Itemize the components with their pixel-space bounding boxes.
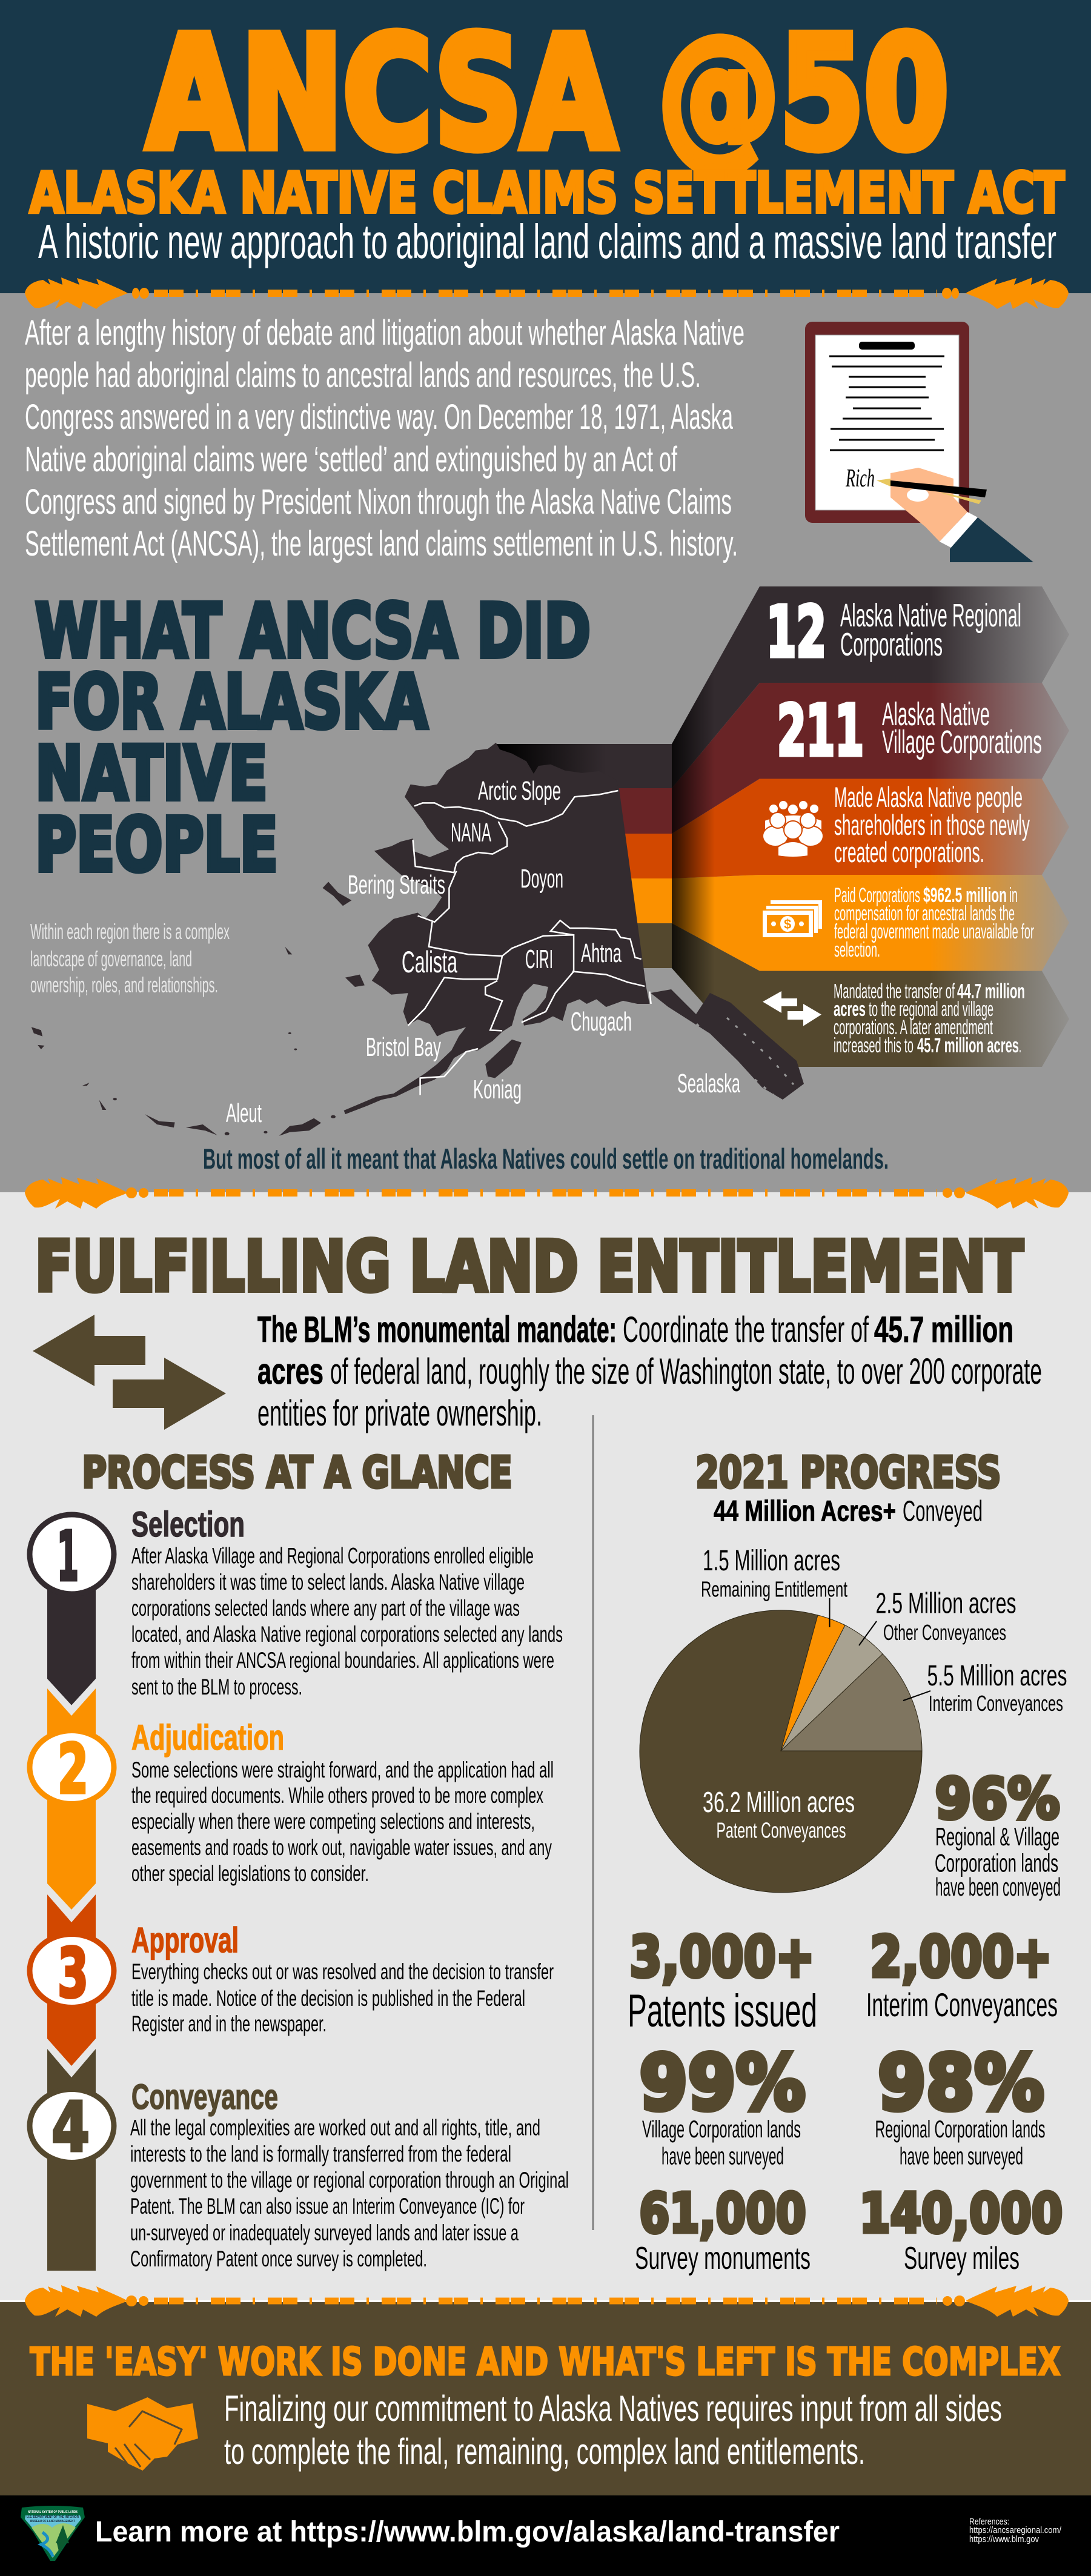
pie labels: Other Conveyances [883,1620,1006,1645]
step 1: selection [30,1505,563,1705]
map region labels: Ahtna [581,938,622,968]
note: complex landscape: Within each region there is a complex [30,919,230,944]
stat: 96 percent conveyed: 96% [935,1766,1060,1831]
pie labels [701,1545,1067,1843]
text: BLM mandate: Coordinate the transfer of [623,1309,869,1350]
note: complex landscape [30,919,230,997]
map region labels: Arctic Slope [478,776,561,806]
header block [30,4,1064,268]
icon: large transfer arrows [33,1315,226,1430]
step 3: approval: title is made. Notice of the decision is published in the Federal [131,1986,525,2011]
ribbon 4: compensation: selection. [834,938,880,961]
map region labels: NANA [451,818,491,848]
step 3: approval: 3 [58,1934,88,2013]
ribbon 5: land transfer: 44.7 million [957,980,1025,1003]
step 2: adjudication: the required documents. While others proved to be more complex [131,1783,543,1808]
map region labels: Calista [402,945,457,979]
step 3: approval: Everything checks out or was resolved and the decision to transfer [131,1959,554,1984]
divider: feather band middle [25,1177,1069,1209]
step 1: selection: sent to the BLM to process. [131,1675,302,1699]
stat: village lands surveyed: 99% [640,2039,806,2127]
panel: closing message background [0,2302,1091,2495]
pie chart: acres by status [640,1610,922,1893]
heading: what ANCSA did: NATIVE [35,731,268,817]
icon: cash stack [763,900,822,937]
step 4: conveyance: Patent. The BLM can also issue an Interim Conveyance (IC) for [130,2194,525,2219]
step 2: adjudication: easements and roads to work out, navigable water issues, and any [131,1835,552,1860]
text: BLM mandate: acres [257,1351,323,1392]
divider: feather band bottom [0,2285,1091,2317]
logo: BLM shield: U.S. DEPARTMENT OF THE INTERIOR [27,2515,79,2519]
step 4: conveyance: interests to the land is formally transferred from the federal [130,2142,511,2166]
stat: village lands surveyed: Village Corporation lands [642,2116,801,2143]
text: finalizing commitment [224,2388,1002,2472]
panel: header background [0,0,1091,293]
icon: hand signing document: Rich [845,465,875,493]
stat: regional lands surveyed: 98% [878,2039,1044,2127]
ribbon 2: village corporations: 211 [777,691,864,772]
step 1: selection: 1 [57,1518,79,1596]
step 1: selection: from within their ANCSA regional boundaries. All applications were [131,1648,554,1673]
step 4: conveyance: All the legal complexities are worked out and all rights, title, and [130,2116,540,2140]
stat: patents issued: Patents issued [628,1985,817,2037]
references [969,2517,1062,2544]
icon: group of people [763,800,823,857]
ribbon 5: land transfer: 45.7 million acres [917,1034,1019,1057]
stat: village lands surveyed [640,2039,806,2170]
logo: BLM shield [21,2506,85,2561]
ribbon 5: land transfer: increased this to [834,1034,914,1057]
step 4: conveyance: government to the village or regional corporation through an Original [130,2168,569,2193]
map region labels: CIRI [525,944,553,974]
step 2: adjudication [30,1688,554,1910]
icon: hand signing document [805,322,1033,562]
map: Alaska regions [32,743,804,1136]
map region labels: Aleut [226,1098,262,1128]
step 4: conveyance: 4 [51,2088,90,2167]
stat: survey monuments [635,2182,811,2276]
references: https://www.blm.gov [969,2534,1039,2544]
logo: BLM shield: NATIONAL SYSTEM OF PUBLIC LANDS [28,2511,78,2514]
map region labels [226,776,740,1128]
stat: interim conveyances [866,1924,1058,2023]
step 3: approval [30,1894,554,2066]
step 4: conveyance [30,2049,569,2271]
ribbon 5: land transfer [763,980,1025,1057]
ribbon 4: compensation [763,884,1034,961]
intro paragraph [25,313,744,563]
text: BLM mandate [257,1309,1042,1433]
connector bars from map to ribbons [496,744,672,968]
step 1: selection: corporations selected lands where any part of the village was [131,1596,520,1621]
text: BLM mandate: entities for private ownership. [257,1393,542,1433]
pie labels: Patent Conveyances [716,1817,846,1843]
ribbon 2: village corporations: Alaska Native [882,696,990,732]
pie labels: Remaining Entitlement [701,1576,847,1602]
ribbon 5: land transfer: acres [834,998,866,1021]
pie labels: 1.5 Million acres [703,1545,840,1577]
stat: village lands surveyed: have been surveyed [662,2143,784,2170]
stat: patents issued: 3,000+ [630,1924,814,1990]
ribbon 1: regional corporations: Corporations [840,626,943,663]
text: BLM mandate: The BLM’s monumental mandate: [257,1309,617,1350]
step 2: adjudication: other special legislations to consider. [131,1861,369,1886]
heading: 2021 progress: 44 Million Acres+ [714,1495,896,1528]
stat: survey monuments: Survey monuments [635,2241,811,2276]
step 4: conveyance: Conveyance [131,2077,278,2117]
step 4: conveyance: Confirmatory Patent once survey is completed. [130,2246,427,2271]
note: complex landscape: landscape of governance, land [30,946,192,971]
pie labels: 36.2 Million acres [703,1787,855,1819]
map region labels: Bering Straits [348,870,445,900]
heading: 2021 progress [695,1447,1001,1528]
stat: interim conveyances: 2,000+ [870,1924,1052,1990]
step 2: adjudication: especially when there were competing selections and interests, [131,1809,535,1834]
heading: what ANCSA did: PEOPLE [35,802,278,888]
ribbon 4: compensation: in [1009,884,1018,907]
map region labels: Sealaska [677,1069,740,1098]
ribbon 3: shareholders [763,781,1030,868]
logo: BLM shield: BUREAU OF LAND MANAGEMENT [30,2520,75,2523]
ribbon 1: regional corporations [766,592,1021,673]
ribbon 4: compensation: Paid Corporations [834,884,920,907]
text: BLM mandate: 45.7 million [874,1309,1013,1350]
heading: what ANCSA did [35,588,591,888]
references: References: [969,2517,1009,2527]
ribbon 5: land transfer: Mandated the transfer of [834,980,955,1003]
stat: survey monuments: 61,000 [640,2182,806,2245]
map region labels: Bristol Bay [366,1032,441,1062]
stat: survey miles: Survey miles [904,2241,1020,2276]
icon: cash stack: $ [784,917,791,932]
panel: footer background [0,2495,1091,2576]
icon: handshake [87,2397,198,2471]
step 1: selection: shareholders it was time to select lands. Alaska Native village [131,1570,525,1595]
heading: 2021 progress: Conveyed [903,1495,983,1528]
step 2: adjudication: 2 [58,1730,88,1809]
step 2: adjudication: Some selections were straight forward, and the application had all [131,1758,554,1782]
map region labels: Chugach [571,1007,632,1037]
ribbon 1: regional corporations: 12 [766,592,826,673]
pie labels: 2.5 Million acres [876,1587,1016,1620]
step 3: approval: Register and in the newspaper. [131,2011,327,2036]
stat: patents issued [628,1924,817,2037]
references: https://ancsaregional.com/ [969,2525,1062,2535]
heading: what ANCSA did: WHAT ANCSA DID [35,588,591,674]
step 2: adjudication: Adjudication [131,1718,284,1758]
ribbons: key facts shapes [672,586,1069,1067]
panel: land entitlement background [0,1192,1091,2302]
step 1: selection: After Alaska Village and Regional Corporations enrolled eligible [131,1544,534,1568]
stat: regional lands surveyed [875,2039,1046,2170]
map region labels: Doyon [520,864,563,894]
heading: 2021 progress: 2021 PROGRESS [695,1447,1001,1498]
stat: 96 percent conveyed [935,1766,1061,1901]
map region labels: Koniag [473,1075,522,1104]
heading: process at a glance: PROCESS AT A GLANCE [82,1447,512,1498]
ribbon 2: village corporations [777,691,1042,772]
panel: what ANCSA did background [0,293,1091,1192]
step 1: selection: located, and Alaska Native regional corporations selected any lands [131,1622,563,1647]
intro paragraph: Native aboriginal claims were ‘settled’ and extinguished by an Act of [25,440,678,479]
step 4: conveyance: un-surveyed or inadequately surveyed lands and later issue a [130,2220,519,2245]
step 3: approval: Approval [131,1920,239,1960]
heading: what ANCSA did: FOR ALASKA [35,659,428,745]
ribbon 4: compensation: $962.5 million [923,884,1007,907]
ribbon 5: land transfer: . [1019,1034,1021,1057]
stat: survey miles [859,2182,1063,2276]
footer link: Learn more at https://www.blm.gov/alaska/land-transfer [95,2516,840,2548]
note: complex landscape: ownership, roles, and relationships. [30,972,218,997]
divider: feather band top [25,277,1069,309]
step 1: selection: Selection [131,1505,245,1544]
icon: transfer arrows [763,991,821,1026]
